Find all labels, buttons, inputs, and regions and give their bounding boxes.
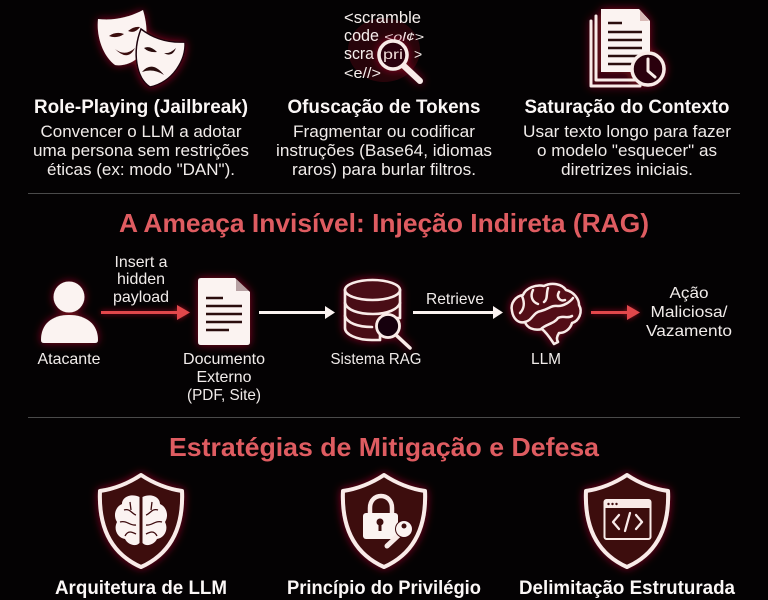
text: token obfuscation description: raros) para burlar filtros. — [292, 161, 476, 179]
icon: RAG database — [345, 280, 410, 348]
text: role-playing description — [33, 123, 249, 179]
panel: role-playing — [33, 10, 249, 179]
heading: indirect injection: A Ameaça Invisível: Injeção Indireta (RAG) — [119, 208, 649, 238]
panel: LLM architecture — [55, 475, 227, 599]
arrow: document to RAG — [259, 306, 335, 319]
label: insert payload: Insert a — [114, 254, 168, 271]
label: malicious action — [646, 285, 732, 340]
icon: stacked documents with clock — [591, 9, 664, 86]
heading: structured delimitation: Delimitação Estruturada — [519, 578, 735, 599]
panel: token obfuscation — [276, 9, 492, 179]
label: attacker: Atacante — [38, 351, 100, 368]
arrow: RAG to LLM — [413, 306, 503, 319]
label: RAG system: Sistema RAG — [330, 351, 422, 368]
text: token obfuscation description: Fragmentar ou codificar — [293, 123, 476, 141]
label: malicious action: Maliciosa/ — [650, 304, 728, 321]
text: role-playing description: éticas (ex: modo "DAN"). — [47, 161, 235, 179]
icon: external document — [198, 278, 250, 345]
label: retrieve: Retrieve — [426, 291, 484, 308]
heading: token obfuscation: Ofuscação de Tokens — [288, 97, 480, 118]
arrow: LLM to action — [591, 305, 640, 320]
label: insert payload: hidden — [117, 271, 165, 288]
icon: shield with code window — [586, 475, 668, 567]
icon: scrambled code with magnifier: scra — [344, 45, 375, 63]
heading: LLM architecture: Arquitetura de LLM — [55, 578, 227, 599]
label: external document — [183, 351, 265, 404]
heading: mitigation: Estratégias de Mitigação e Defesa — [169, 432, 600, 462]
label: external document: (PDF, Site) — [187, 387, 261, 404]
icon: scrambled code with magnifier — [344, 9, 424, 82]
text: context saturation description: Usar texto longo para fazer — [523, 123, 732, 141]
label: insert payload: payload — [113, 289, 169, 306]
icon: scrambled code with magnifier: <scramble — [344, 9, 421, 27]
icon: LLM brain — [512, 284, 581, 344]
text: token obfuscation description — [276, 123, 492, 179]
label: LLM: LLM — [531, 351, 561, 368]
icon: shield with brain — [100, 475, 182, 567]
icon: shield with lock and key — [343, 475, 425, 567]
text: token obfuscation description: instruções (Base64, idiomas — [276, 142, 492, 160]
heading: role-playing: Role-Playing (Jailbreak) — [34, 97, 248, 118]
panel: structured delimitation — [519, 475, 735, 599]
flow diagram: indirect injection — [38, 254, 732, 404]
panel: context saturation — [523, 9, 732, 179]
arrow: attacker to document — [101, 305, 190, 320]
label: malicious action: Vazamento — [646, 323, 732, 340]
icon: scrambled code with magnifier: <ol¢> — [384, 30, 424, 44]
icon: attacker — [41, 282, 98, 343]
panel: least privilege — [287, 475, 481, 599]
text: context saturation description: o modelo "esquecer" as — [537, 142, 717, 160]
label: malicious action: Ação — [670, 285, 709, 302]
icon: scrambled code with magnifier: code — [344, 27, 379, 45]
icon: scrambled code with magnifier: > — [414, 46, 422, 62]
label: insert payload — [113, 254, 169, 306]
label: external document: Externo — [196, 369, 252, 386]
icon: scrambled code with magnifier: pri — [383, 46, 403, 62]
icon: theatre masks — [98, 10, 185, 87]
text: context saturation description — [523, 123, 732, 179]
text: role-playing description: uma persona sem restrições — [33, 142, 249, 160]
text: context saturation description: diretrizes iniciais. — [561, 161, 693, 179]
heading: context saturation: Saturação do Contexto — [524, 97, 730, 118]
icon: scrambled code with magnifier: <e//> — [344, 65, 381, 82]
heading: least privilege: Princípio do Privilégio — [287, 578, 481, 599]
text: role-playing description: Convencer o LLM a adotar — [40, 123, 242, 141]
label: external document: Documento — [183, 351, 265, 368]
